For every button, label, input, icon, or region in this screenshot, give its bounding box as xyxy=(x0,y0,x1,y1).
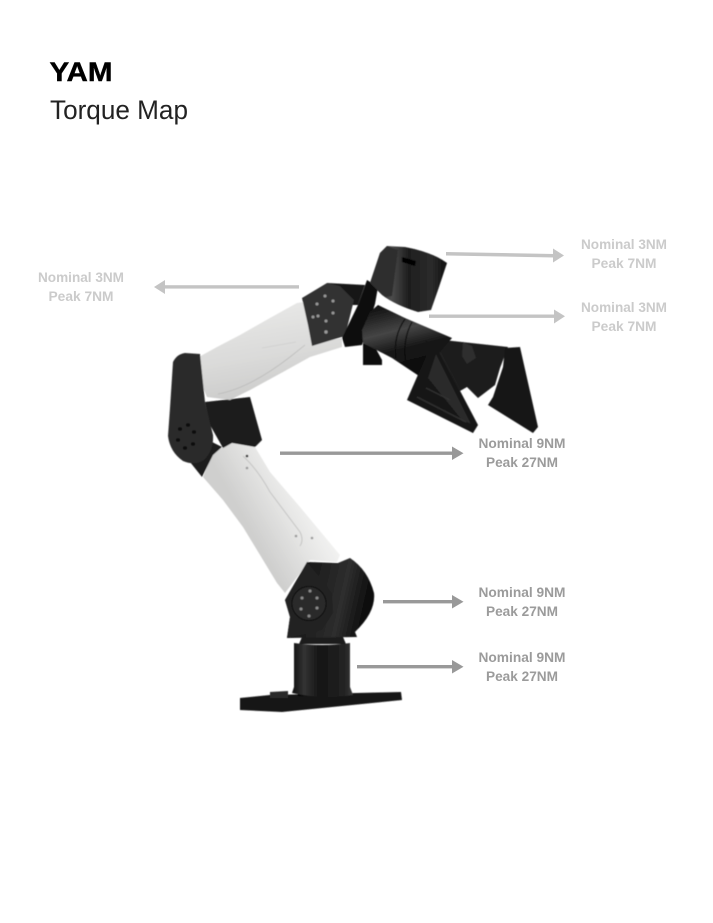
gripper body xyxy=(425,338,508,398)
base motor cylinder xyxy=(292,637,353,697)
label: wrist motor top torque: Peak 7NM xyxy=(592,256,656,271)
label: base motor torque: Peak 27NM xyxy=(486,669,558,684)
label: upper-left joint torque xyxy=(38,270,124,304)
title: YAM: YAM xyxy=(50,57,112,87)
label: base joint torque xyxy=(478,585,566,619)
label: elbow torque: Nominal 9NM xyxy=(478,436,566,451)
label: base joint torque: Nominal 9NM xyxy=(478,585,566,600)
wrist joint plate xyxy=(302,283,354,346)
right gripper finger xyxy=(488,347,538,433)
arrow: elbow joint xyxy=(280,446,464,460)
label: base motor torque xyxy=(478,650,566,684)
label: upper-left joint torque: Nominal 3NM xyxy=(38,270,124,285)
label: base joint torque: Peak 27NM xyxy=(486,604,558,619)
foot plate xyxy=(240,690,402,712)
shoulder side cover xyxy=(168,353,213,463)
arrow: upper-left joint xyxy=(154,280,299,294)
arrow: wrist motor lower xyxy=(429,310,565,324)
elbow lower wedge xyxy=(190,440,222,477)
forearm cylinder xyxy=(362,305,452,380)
elbow joint xyxy=(205,397,262,448)
arrow: wrist motor top xyxy=(446,248,564,262)
label: wrist motor lower torque: Peak 7NM xyxy=(592,319,656,334)
robot arm illustration xyxy=(168,246,538,712)
gripper knob xyxy=(462,342,476,364)
label: base motor torque: Nominal 9NM xyxy=(478,650,566,665)
label: elbow torque xyxy=(478,436,566,470)
base joint housing xyxy=(285,558,374,638)
forearm foot xyxy=(363,343,382,365)
arrow: base joint xyxy=(383,595,464,608)
label: upper-left joint torque: Peak 7NM xyxy=(48,289,114,304)
upper arm white link xyxy=(197,302,342,400)
wrist joint dark rear xyxy=(327,283,365,305)
label: elbow torque: Peak 27NM xyxy=(486,455,558,470)
label: wrist motor lower torque xyxy=(581,300,667,334)
lower arm white link xyxy=(203,443,340,593)
wrist bracket xyxy=(342,280,378,347)
left gripper finger xyxy=(407,340,478,433)
label: wrist motor top torque: Nominal 3NM xyxy=(581,237,667,252)
arrow: base motor xyxy=(357,660,464,674)
label: wrist motor top torque xyxy=(581,237,667,271)
label: wrist motor lower torque: Nominal 3NM xyxy=(581,300,667,315)
subtitle: Torque Map: Torque Map xyxy=(50,95,188,125)
wrist motor xyxy=(370,246,447,312)
